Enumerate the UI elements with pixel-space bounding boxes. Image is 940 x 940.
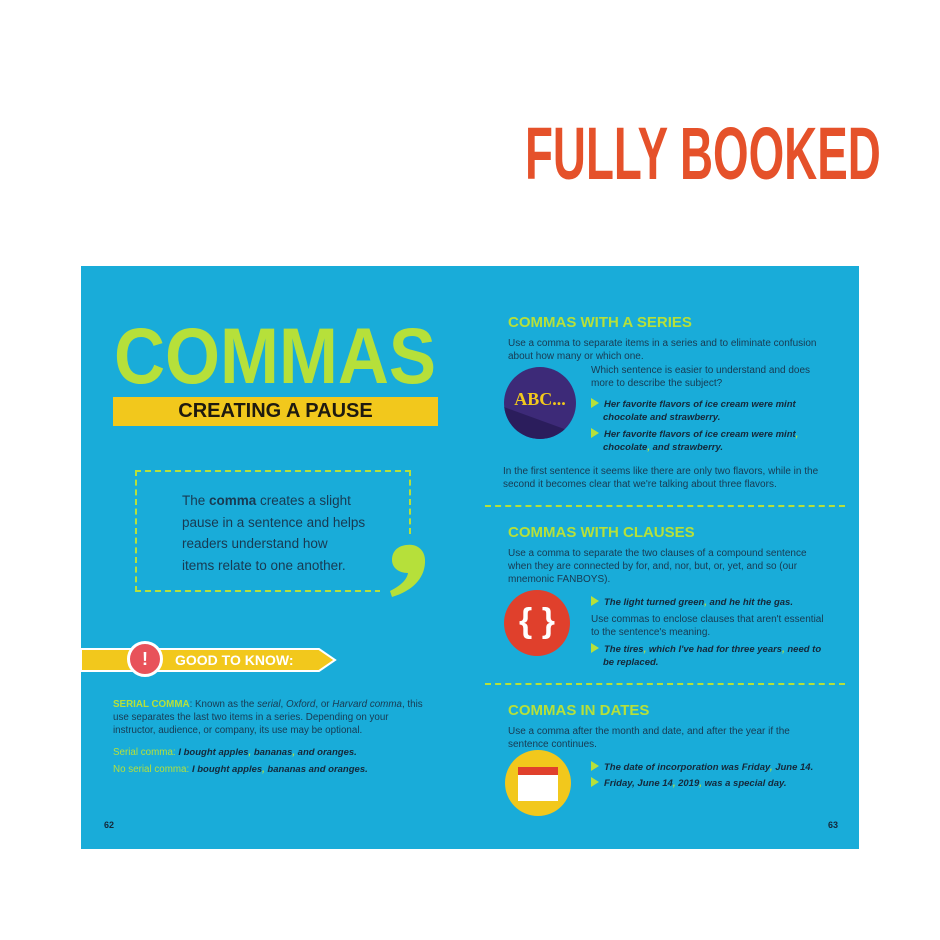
dashed box with definition bbox=[135, 470, 411, 592]
examples: The light turned green, and he hit the gas. bbox=[604, 597, 793, 608]
examples bbox=[591, 761, 813, 789]
intro: Use a comma after the month and date, and after the year if the sentence continues. bbox=[508, 726, 790, 750]
serial comma examples: No serial comma: I bought apples, bananas and oranges. bbox=[113, 764, 368, 775]
icon: braces: { } bbox=[519, 602, 555, 640]
title: COMMAS: COMMAS bbox=[114, 311, 436, 400]
examples: Her favorite flavors of ice cream were mint chocolate and strawberry. bbox=[603, 399, 796, 423]
icon: calendar bbox=[505, 750, 571, 816]
definition text: pause in a sentence and helps bbox=[182, 514, 365, 530]
icon: ABC: ABC... bbox=[514, 389, 566, 409]
section: commas in dates bbox=[505, 702, 813, 816]
subtitle bar: CREATING A PAUSE bbox=[178, 400, 373, 422]
icon: big comma bbox=[380, 538, 426, 597]
icon: lightbulb: ! bbox=[142, 649, 148, 669]
icon: braces bbox=[504, 590, 570, 656]
intro: Use a comma to separate the two clauses of a compound sentence when they are connected by for, and, nor, but, or, yet, and so (our mnemonic FANBOYS). bbox=[508, 548, 807, 585]
definition text: readers understand how bbox=[182, 536, 328, 551]
examples bbox=[591, 398, 798, 453]
examples: Use commas to enclose clauses that aren't essential to the sentence's meaning. bbox=[591, 614, 824, 638]
heading: COMMAS WITH A SERIES bbox=[508, 314, 692, 331]
icon: lightbulb bbox=[127, 641, 163, 677]
question: Which sentence is easier to understand and does more to describe the subject? bbox=[591, 365, 810, 389]
examples: The date of incorporation was Friday, June 14. bbox=[604, 762, 813, 773]
section: commas with a series bbox=[503, 314, 818, 490]
subtitle bar bbox=[113, 397, 438, 426]
heading: COMMAS WITH CLAUSES bbox=[508, 524, 695, 541]
banner text: GOOD TO KNOW: bbox=[175, 652, 293, 668]
definition text: The comma creates a slight bbox=[182, 493, 351, 508]
good to know banner bbox=[81, 641, 337, 677]
icon: ABC bbox=[504, 367, 576, 439]
examples bbox=[591, 596, 824, 668]
serial comma text: SERIAL COMMA: Known as the serial, Oxford, or Harvard comma, this use separates the last two items in a series. Depending on your instructor, audience, or company, its use may be optional. bbox=[113, 699, 423, 736]
examples: The tires, which I've had for three years, need to be replaced. bbox=[603, 644, 821, 668]
section: commas with clauses bbox=[504, 524, 824, 668]
page number 62: 62 bbox=[104, 820, 114, 830]
page number 63: 63 bbox=[828, 820, 838, 830]
examples: Friday, June 14, 2019, was a special day. bbox=[604, 778, 787, 789]
page background bbox=[81, 266, 859, 849]
definition text: items relate to one another. bbox=[182, 558, 346, 572]
heading: COMMAS IN DATES bbox=[508, 702, 649, 719]
examples: Her favorite flavors of ice cream were mint, chocolate, and strawberry. bbox=[603, 429, 798, 453]
intro: Use a comma to separate items in a series and to eliminate confusion about how many or which one. bbox=[508, 338, 816, 362]
definition text bbox=[182, 493, 365, 572]
serial comma examples bbox=[113, 747, 368, 775]
serial comma examples: Serial comma: I bought apples, bananas, and oranges. bbox=[113, 747, 357, 758]
conclusion: In the first sentence it seems like there are only two flavors, while in the second it becomes clear that we're talking about three flavors. bbox=[503, 466, 818, 490]
